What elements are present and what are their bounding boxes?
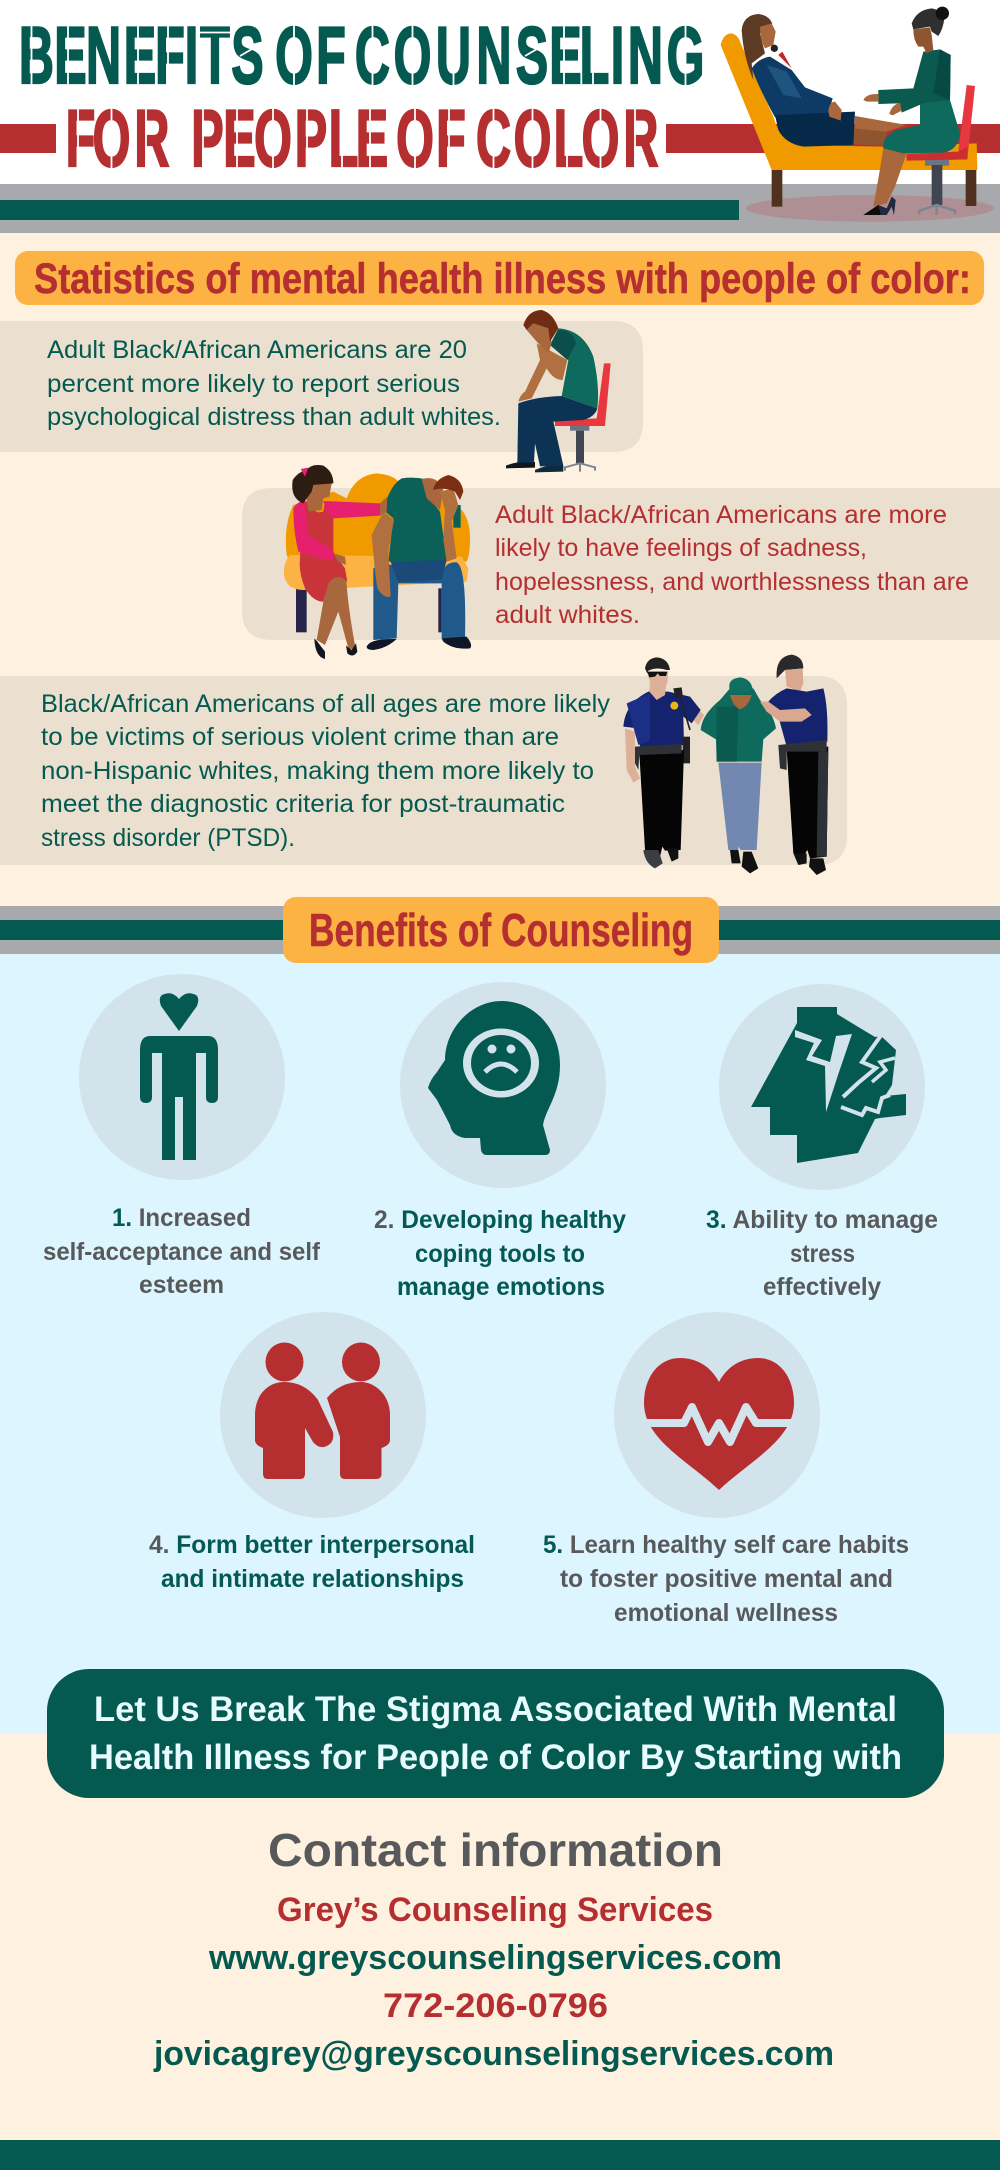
icon: heart with pulse (640, 1358, 798, 1490)
label: benefit 5: emotional wellness (614, 1599, 838, 1627)
footer band (0, 2140, 1000, 2170)
title (19, 11, 704, 184)
panel: statistic 1 (0, 321, 643, 452)
benefit 2 (374, 982, 626, 1301)
contact information: jovicagrey@greyscounselingservices.com (153, 2035, 834, 2073)
heading: benefits of counseling (283, 897, 719, 963)
label: benefit 4: 4. Form better interpersonal (149, 1531, 475, 1559)
label: benefit 1: self-acceptance and self (43, 1238, 321, 1266)
label: benefit 1: esteem (139, 1271, 224, 1299)
benefit 4 (149, 1312, 475, 1593)
text: statistic 1: Adult Black/African Americans are 20 (47, 336, 467, 364)
label: benefit 2: coping tools to (415, 1240, 585, 1268)
icon: person with heart (140, 993, 218, 1160)
benefit 1 (43, 974, 321, 1299)
label: benefit 1 (43, 1204, 321, 1299)
label: benefit 5: to foster positive mental and (560, 1565, 893, 1593)
icon: head with sad face (428, 1001, 560, 1155)
label: benefit 5 (543, 1531, 909, 1627)
benefit 5 (543, 1312, 909, 1627)
text: statistic 3: non-Hispanic whites, making them more likely to (41, 757, 594, 785)
panel: statistic 2 (242, 488, 1000, 640)
text: statistic 3: stress disorder (PTSD). (41, 824, 295, 852)
callout: break the stigma: Let Us Break The Stigma Associated With Mental (94, 1690, 897, 1729)
title: BENEFITS OF COUNSELING (19, 11, 704, 101)
text: statistic 2: hopelessness, and worthlessness than are (495, 568, 969, 596)
heading: benefits of counseling: Benefits of Counseling (309, 904, 693, 956)
illustration: police officers escorting suspect (623, 655, 828, 875)
illustration: counseling session (721, 7, 994, 222)
contact information: Contact information (268, 1824, 723, 1876)
text: statistic 3: to be victims of serious violent crime than are (41, 723, 559, 751)
text: statistic 2: Adult Black/African Americans are more (495, 501, 947, 529)
section band (0, 906, 1000, 954)
illustration: woman comforting man on sofa (284, 465, 471, 659)
contact information (153, 1824, 834, 2073)
title: FOR PEOPLE OF COLOR (66, 94, 659, 184)
header band (0, 0, 1000, 233)
label: benefit 5: 5. Learn healthy self care habits (543, 1531, 909, 1559)
text: statistic 1: psychological distress than adult whites. (47, 403, 501, 431)
panel: statistic 3 (0, 676, 847, 865)
benefit 3 (706, 984, 938, 1301)
text: statistic 3: meet the diagnostic criteria for post-traumatic (41, 790, 565, 818)
icon: two people (255, 1342, 390, 1479)
label: benefit 2 (374, 1206, 626, 1301)
label: benefit 4: and intimate relationships (161, 1565, 464, 1593)
text: statistic 2: likely to have feelings of sadness, (495, 534, 867, 562)
label: benefit 3: stress (790, 1240, 855, 1268)
label: benefit 4 (149, 1531, 475, 1593)
contact information: www.greyscounselingservices.com (208, 1939, 782, 1977)
text: statistic 2 (495, 501, 969, 629)
contact information: Grey’s Counseling Services (277, 1891, 713, 1929)
illustration: distressed man on chair (506, 310, 611, 472)
callout: break the stigma: Health Illness for People of Color By Starting with (89, 1738, 902, 1777)
label: benefit 3 (706, 1206, 938, 1301)
callout: break the stigma (47, 1669, 944, 1798)
label: benefit 1: 1. Increased (112, 1204, 251, 1232)
label: benefit 2: manage emotions (397, 1273, 605, 1301)
label: benefit 3: 3. Ability to manage (706, 1206, 938, 1234)
panel: benefits background (0, 954, 1000, 1734)
label: benefit 3: effectively (763, 1273, 881, 1301)
text: statistic 3: Black/African Americans of all ages are more likely (41, 690, 611, 718)
icon: head with lightning cracks (751, 1007, 906, 1163)
text: statistic 1 (47, 336, 501, 431)
contact information: 772-206-0796 (383, 1987, 608, 2025)
text: statistic 2: adult whites. (495, 601, 640, 629)
label: benefit 2: 2. Developing healthy (374, 1206, 626, 1234)
text: statistic 1: percent more likely to report serious (47, 370, 460, 398)
text: statistic 3 (41, 690, 611, 852)
